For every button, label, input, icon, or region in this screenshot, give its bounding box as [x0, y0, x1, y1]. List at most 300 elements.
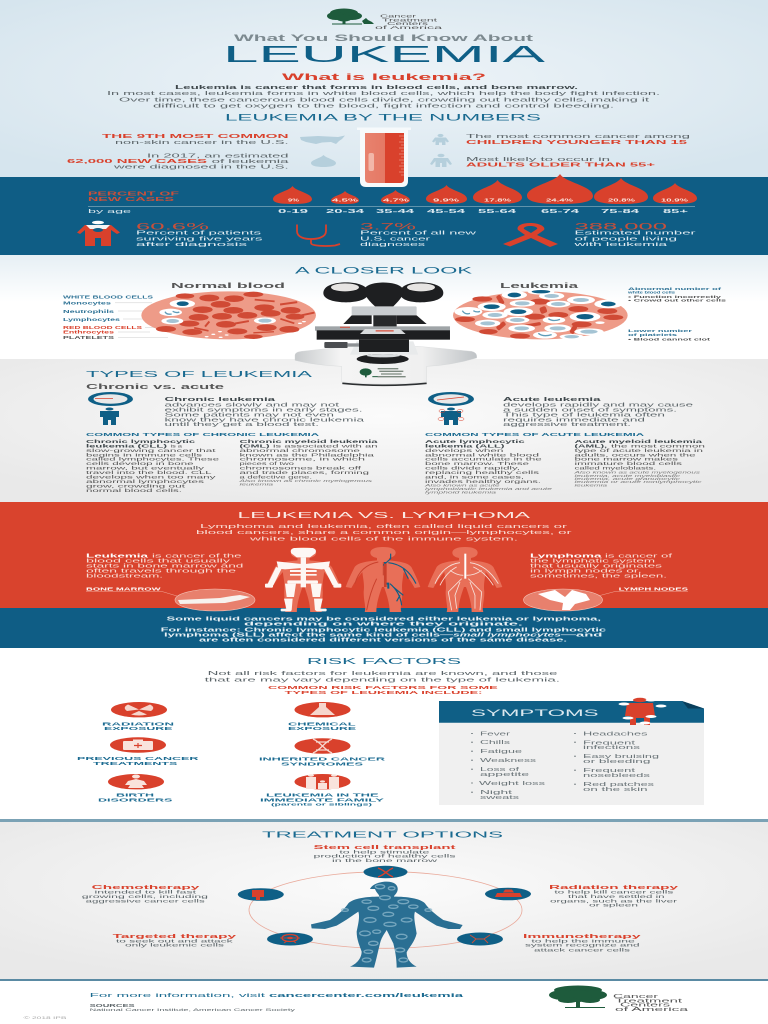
text block: chronic leukemia: Chronic leukemia — [164, 397, 275, 403]
heading: types of leukemia: TYPES OF LEUKEMIA — [86, 369, 313, 379]
symptoms list column 1: sweats — [480, 795, 520, 801]
text block: acute leukemia: a sudden onset of symptoms. — [503, 408, 677, 414]
panel: risk factors background — [0, 648, 768, 820]
chart: normal blood circle — [141, 291, 316, 339]
age labels: 55-64 — [478, 209, 516, 215]
callout: lymph nodes: LYMPH NODES — [619, 586, 688, 592]
icon: stethoscope — [297, 224, 340, 246]
logo: header: of America — [375, 25, 444, 30]
text block: chemotherapy: Chemotherapy — [92, 885, 202, 891]
text block: ALL — [423, 439, 552, 494]
stat: 60.6% — [136, 221, 263, 248]
text block: chemotherapy — [82, 885, 209, 904]
symptoms list column 2: Headaches — [583, 732, 648, 738]
footer: sources: National Cancer Institute, American Cancer Society — [90, 1008, 296, 1012]
age labels: 35-44 — [376, 209, 414, 215]
icon: ribbon — [503, 223, 558, 247]
panel: closer look background — [0, 255, 768, 359]
stat: 60.6%: surviving five years — [136, 236, 263, 242]
symptoms list column 1: Fatigue — [480, 749, 522, 755]
stat: 3.7% — [360, 221, 476, 248]
drop values: 4.5% — [332, 198, 359, 202]
risk: family — [260, 774, 384, 807]
risk: chemical exposure: EXPOSURE — [288, 726, 356, 731]
text block: definition: In most cases, leukemia forms in white blood cells, which help the body fight infection. — [107, 91, 661, 97]
risk: radiation exposure: RADIATION — [102, 722, 174, 726]
text block: acute leukemia: develops rapidly and may cause — [503, 402, 693, 408]
subheading: chronic vs acute: Chronic vs. acute — [86, 384, 224, 391]
text block: intro: blood cancers, share a common origin—lymphocytes, or — [196, 530, 572, 536]
text block: definition: Leukemia is cancer that forms in blood cells, and bone marrow. — [175, 85, 579, 91]
heading: by the numbers: LEUKEMIA BY THE NUMBERS — [225, 112, 541, 122]
text block: ALL: replacing healthy cells — [425, 470, 541, 475]
panel: header background — [0, 0, 768, 177]
stat: 3.7%: Percent of all new — [360, 230, 476, 236]
risk: birth disorders: BIRTH — [116, 792, 154, 798]
text block: liquid cancers note — [161, 616, 607, 644]
stat: 388,000: Estimated number — [574, 230, 696, 236]
text block: stem cell transplant: in the bone marrow — [332, 858, 438, 864]
text block: lymphoma description: is cancer of — [605, 553, 673, 559]
text block: targeted therapy: only leukemic cells — [125, 943, 225, 949]
text block: radiation therapy: organs, such as the liver — [550, 898, 678, 904]
text block: liquid cancers note: depending on where they originate. — [244, 622, 525, 628]
text block: CML: chromosomes break off — [240, 466, 363, 471]
figure: circulatory system — [346, 547, 420, 612]
text block: AML: leukemia, acute myeloblastic — [574, 474, 681, 478]
stat: children: CHILDREN YOUNGER THAN 15 — [466, 140, 687, 146]
symptoms list column 1: Weakness — [480, 758, 537, 764]
age labels: 65-74 — [541, 209, 579, 215]
stat: adults: ADULTS OLDER THAN 55+ — [466, 162, 655, 168]
footer: more information — [90, 993, 466, 999]
stat: 62,000 new cases: were diagnosed in the U.S. — [114, 165, 288, 171]
text block: liquid cancers note: lymphoma (SLL) affect the same kind of cells— — [164, 632, 453, 638]
stat: 9th most common: THE 9TH MOST COMMON — [102, 134, 289, 140]
icon: drop — [311, 155, 336, 167]
icon: chemotherapy node — [238, 888, 284, 901]
text block: liquid cancers note: small lymphocytes — [453, 632, 562, 638]
text block: liquid cancers note: Some liquid cancers may be considered either leukemia or lymphoma, — [166, 616, 603, 622]
drop values: 10.9% — [661, 198, 689, 202]
text block: CLL: called lymphocytes. These — [86, 457, 220, 462]
text block: CML: known as the Philadelphia — [240, 452, 375, 457]
labels: normal blood legend — [63, 294, 170, 340]
text block: leukemia description — [86, 553, 244, 579]
stat: 388,000: 388,000 — [574, 221, 667, 231]
text block: chronic leukemia: exhibit symptoms in early stages. — [164, 408, 362, 414]
subheading: common risk factors: COMMON RISK FACTORS FOR SOME — [268, 685, 498, 690]
text block: AML: adults, occurs when the — [574, 452, 697, 457]
text block: CML: pieces of two — [240, 461, 295, 466]
logo: header — [327, 8, 444, 30]
symptoms list column 1: Loss of — [480, 767, 520, 773]
stat: 388,000: of people living — [574, 236, 677, 242]
text block: CML: is associated with an — [273, 443, 379, 448]
heading: normal blood: Normal blood — [171, 281, 285, 290]
text block: definition: Over time, these cancerous blood cells divide, crowding out healthy cells, making it — [119, 97, 650, 103]
panel: blue note background — [0, 608, 768, 648]
text block: AML: type of acute leukemia in — [574, 448, 704, 453]
text block: CML: leukemia — [240, 482, 273, 486]
logo: footer — [549, 986, 688, 1013]
risk: radiation exposure: EXPOSURE — [104, 726, 173, 731]
text block: CML: a defective gene. — [240, 474, 312, 480]
symptoms list column 2: Red patches — [583, 782, 655, 788]
text block: chemotherapy: aggressive cancer cells — [86, 898, 206, 904]
panel: stats band background — [0, 177, 768, 255]
chart heading: PERCENT OF — [88, 192, 179, 198]
logo: header: Centers — [387, 21, 428, 26]
text block: radiation therapy: that have settled in — [568, 894, 665, 900]
labels: leukemia legend — [627, 286, 728, 342]
drop values: 17.8% — [484, 198, 512, 202]
logo: footer: Treatment — [615, 998, 683, 1004]
text block: immunotherapy: attack cancer cells — [534, 947, 631, 953]
text block: CLL: abnormal lymphocytes — [86, 479, 206, 484]
stat: 388,000 — [572, 221, 696, 248]
footer: sources — [90, 1003, 296, 1012]
text block: AML: bone marrow makes — [574, 457, 680, 462]
text block: CML — [237, 439, 379, 486]
text block: risk intro — [205, 671, 561, 684]
labels: leukemia legend: white blood cells — [627, 290, 676, 294]
labels: normal blood legend: Lymphocytes — [63, 317, 121, 322]
text block: AML: called myeloblasts. — [574, 466, 656, 471]
symptoms list column 1: Weight loss — [479, 781, 546, 787]
age labels: 75-84 — [601, 209, 639, 215]
text block: immunotherapy: Immunotherapy — [523, 934, 643, 940]
text block: CLL: begins in immune cells — [86, 452, 204, 457]
text block: definition — [107, 85, 661, 109]
text block: radiation therapy: or spleen — [589, 903, 639, 909]
text block: lymphoma description: that usually originates — [530, 563, 663, 569]
text block: targeted therapy: Targeted therapy — [113, 934, 238, 940]
panel: types background — [0, 359, 768, 502]
text block: intro: white blood cells of the immune system. — [247, 536, 519, 542]
labels: leukemia legend: • Crowd out other cells — [628, 298, 728, 302]
footer: copyright: © 2018 IPB — [24, 1016, 66, 1020]
text block: acute leukemia: Acute leukemia — [503, 397, 601, 403]
text block: CLL: is a — [170, 443, 183, 448]
figure: skeleton — [265, 547, 341, 612]
heading: leukemia sample: Leukemia — [500, 281, 580, 290]
text block: acute leukemia: aggressive treatment. — [503, 422, 631, 428]
text block: radiation therapy: Radiation therapy — [549, 885, 680, 891]
risk: family: IMMEDIATE FAMILY — [260, 798, 384, 802]
heading: risk factors: RISK FACTORS — [307, 656, 462, 666]
text block: stem cell transplant: Stem cell transplant — [314, 845, 456, 851]
text block: definition: difficult to get oxygen to the blood, fight infection and control bleeding. — [153, 103, 615, 109]
symptoms list column 1 — [471, 732, 546, 801]
risk: previous cancer treatments: PREVIOUS CANCER — [77, 756, 201, 761]
text block: acute leukemia: requires immediate and — [503, 418, 645, 424]
footer: more information: For more information, visit — [90, 993, 266, 999]
stat: 62,000 new cases: In 2017, an estimated — [147, 153, 289, 159]
text block: leukemia description: bloodstream. — [86, 573, 163, 579]
text block: leukemia description: often travels through the — [86, 568, 236, 574]
callout: bone marrow: BONE MARROW — [86, 586, 161, 592]
panel: leukemia vs lymphoma background — [0, 502, 768, 608]
footer: sources: SOURCES — [90, 1003, 135, 1008]
stat: 3.7%: diagnoses — [360, 242, 426, 248]
chart heading — [88, 192, 179, 203]
text block: CLL: leukemia (CLL) — [86, 443, 168, 448]
text block: CML: and trade places, forming — [240, 470, 370, 475]
risk: chemical exposure: CHEMICAL — [288, 722, 357, 726]
text block: leukemia description: starts in bone marrow and — [86, 563, 244, 569]
labels: normal blood legend: RED BLOOD CELLS — [63, 325, 142, 330]
icon: symptoms person — [618, 698, 666, 725]
diagram: treatment ring — [249, 872, 522, 948]
text block: CLL: grow, crowding out — [86, 483, 187, 488]
callout: lymph nodes — [524, 586, 688, 611]
drop values: 24.4% — [546, 198, 574, 202]
blood drops — [273, 174, 697, 204]
text block: stem cell transplant — [314, 845, 457, 864]
drop values: 9% — [288, 198, 299, 202]
footer: more information: cancercenter.com/leukemia — [269, 993, 466, 999]
risk: previous cancer treatments: TREATMENTS — [93, 761, 177, 766]
labels: normal blood legend: WHITE BLOOD CELLS — [63, 294, 153, 300]
microscope — [295, 282, 477, 385]
stat: adults: Most likely to occur in — [466, 157, 610, 163]
symptoms list column 1: Fever — [480, 732, 511, 738]
text block: liquid cancers note: —and — [561, 632, 602, 638]
bottom divider of treatment — [0, 979, 768, 981]
text block: ALL: abnormal white blood — [425, 452, 540, 457]
risk: previous cancer treatments — [77, 737, 201, 766]
figure: lymphatic system — [428, 547, 502, 612]
drop values: 9.9% — [433, 198, 460, 202]
risk: birth disorders: DISORDERS — [98, 798, 173, 802]
text block: ALL: bone marrow. These — [425, 461, 530, 466]
text block: lymphoma description: in lymph nodes or, — [530, 568, 642, 574]
icon: radiation node — [485, 888, 531, 900]
text block: AML: leukemia — [574, 484, 607, 488]
chart axis title: by age — [88, 209, 131, 215]
stat: 62,000 new cases: 62,000 NEW CASES — [67, 159, 209, 165]
stat: 60.6%: Percent of patients — [136, 230, 262, 236]
symptoms list column 2 — [574, 732, 659, 793]
text block: AML: (AML), — [574, 443, 607, 448]
panel: symptoms — [439, 698, 704, 805]
text block: AML: Acute myeloid leukemia — [574, 439, 703, 444]
age labels: 20-34 — [326, 209, 364, 215]
stat: children: The most common cancer among — [466, 134, 690, 140]
heading: a closer look: A CLOSER LOOK — [295, 265, 472, 275]
text block: lymphoma description: sometimes, the spleen. — [530, 573, 667, 579]
subheading: common types of acute leukemia: COMMON TYPES OF ACUTE LEUKEMIA — [425, 432, 646, 437]
text block: chronic leukemia: know they have chronic leukemia — [164, 418, 364, 424]
stat: adults — [466, 157, 655, 168]
text block: AML — [572, 439, 706, 488]
icon: US map — [300, 136, 345, 144]
subheading: common types of chronic leukemia: COMMON TYPES OF CHRONIC LEUKEMIA — [86, 432, 321, 437]
text block: liquid cancers note: are often considered different versions of the same disease. — [199, 638, 569, 644]
text block: CLL: travel into the blood. CLL — [86, 470, 213, 475]
age labels: 85+ — [663, 209, 688, 215]
symptoms list column 1: appetite — [480, 772, 529, 778]
logo: footer: of America — [615, 1007, 688, 1013]
text block: targeted therapy — [113, 934, 238, 949]
text block: chemotherapy: intended to kill fast — [94, 890, 198, 896]
stat: 62,000 new cases: of leukemia — [212, 159, 289, 165]
text block: ALL: cells accumulate in the — [425, 457, 543, 462]
text block: CLL: slow-growing cancer that — [86, 448, 217, 453]
text block: ALL: Also known as acute — [423, 484, 500, 488]
symptoms list column 2: on the skin — [583, 787, 648, 793]
text block: AML: leukemia or acute nonlymphocytic — [574, 480, 702, 484]
icon: child — [432, 134, 449, 145]
text block: lymphoma description: Lymphoma — [530, 553, 602, 559]
stat: 3.7%: U.S. cancer — [360, 236, 430, 242]
top divider of treatment — [0, 819, 768, 822]
icon: chronic gauge and person — [88, 392, 133, 425]
text block: targeted therapy: to seek out and attack — [116, 938, 234, 944]
stat: 9th most common — [102, 134, 289, 146]
labels: normal blood legend: Monocytes — [63, 300, 112, 306]
stat: 60.6%: after diagnosis — [136, 242, 248, 248]
icon: person survivor — [77, 221, 120, 246]
labels: leukemia legend: Lower number — [628, 328, 693, 333]
text block: AML: leukemia, acute granulocytic — [574, 477, 681, 481]
labels: normal blood legend: Neutrophils — [63, 309, 115, 314]
risk: inherited cancer syndromes — [259, 738, 387, 767]
risk: radiation exposure — [102, 702, 174, 731]
text block: radiation therapy: to help kill cancer cells — [554, 890, 675, 896]
text block: CLL — [86, 439, 220, 493]
symptoms list column 2: nosebleeds — [583, 773, 651, 779]
text block: intro: Lymphoma and leukemia, often called liquid cancers or — [200, 524, 567, 530]
symptoms list column 2: Frequent — [583, 768, 636, 774]
age labels: 0-19 — [278, 209, 308, 215]
text block: risk intro: Not all risk factors for leukemia are known, and those — [208, 671, 557, 677]
text block: risk intro: that are may vary depending on the type of leukemia. — [205, 678, 561, 684]
text block: leukemia description: blood cells that usually — [86, 558, 231, 564]
icon: acute gauge and person — [428, 392, 474, 425]
labels: leukemia legend: of platelets — [628, 332, 679, 337]
text block: ALL: invades healthy organs. — [425, 479, 541, 484]
labels: normal blood legend: Enthrocytes — [63, 330, 115, 334]
symptoms list column 2: infections — [583, 745, 641, 751]
text block: CML: Also known as chronic myelogenous — [237, 479, 373, 483]
risk: chemical exposure — [288, 702, 357, 731]
stat: 388,000: with leukemia — [572, 242, 667, 248]
icon: adult — [430, 154, 452, 167]
panel: treatment background — [0, 822, 768, 979]
text block: ALL: leukemia (ALL) — [425, 443, 506, 448]
logo: footer: Centers — [620, 1003, 671, 1009]
logo: footer: Cancer — [613, 994, 658, 1000]
text block: acute leukemia: This type of leukemia often — [503, 412, 665, 418]
text block: chemotherapy: growing cells, including — [82, 894, 209, 900]
symptoms list column 2: Frequent — [583, 740, 636, 746]
text block: AML: the most common — [611, 443, 706, 448]
text block: liquid cancers note: For instance: Chronic lymphocytic leukemia (CLL) and small lymphocytic — [161, 628, 607, 634]
logo: header: Treatment — [382, 18, 439, 22]
text block: ALL: lymphoid leukemia — [424, 490, 496, 494]
heading: what is leukemia: What is leukemia? — [282, 72, 486, 83]
chart heading: NEW CASES — [88, 197, 176, 203]
symptoms list column 2: or bleeding — [583, 759, 651, 765]
subheading: common risk factors: TYPES OF LEUKEMIA INCLUDE: — [285, 690, 484, 695]
risk: inherited cancer syndromes: INHERITED CANCER — [259, 757, 387, 762]
heading: treatment options: TREATMENT OPTIONS — [262, 829, 504, 839]
callout: bone marrow — [86, 586, 255, 611]
text block: ALL: Acute lymphocytic — [425, 439, 526, 444]
stat: 3.7%: 3.7% — [360, 221, 416, 231]
risk: family: LEUKEMIA IN THE — [266, 792, 379, 798]
symptoms list column 1: Night — [480, 790, 513, 796]
age labels: 45-54 — [427, 209, 465, 215]
text block: lymphoma description: the lymphatic system — [530, 558, 656, 564]
text block: ALL: and, in some cases, — [425, 474, 524, 480]
text block: CLL: marrow, but eventually — [86, 466, 206, 471]
heading: leukemia vs lymphoma: LEUKEMIA VS. LYMPHOMA — [238, 510, 531, 520]
text block: CLL: normal blood cells. — [86, 488, 182, 493]
stat: 60.6%: 60.6% — [136, 221, 209, 231]
text block: immunotherapy: system recognize and — [525, 943, 640, 949]
text block: leukemia description: Leukemia — [86, 553, 148, 559]
text block: CLL: cells develop in bone — [86, 461, 195, 466]
drop values: 20.8% — [608, 198, 636, 202]
labels: leukemia legend: • Function incorrectly — [628, 294, 723, 299]
chart: leukemia circle — [453, 289, 628, 339]
text block: ALL: cells divide rapidly, — [425, 466, 520, 471]
risk: inherited cancer syndromes: SYNDROMES — [281, 762, 363, 767]
labels: normal blood legend: PLATELETS — [63, 335, 114, 340]
stat: 62,000 new cases — [67, 153, 289, 171]
test tube — [357, 128, 411, 187]
text block: CLL: develops when too many — [86, 474, 217, 480]
text block: CLL: Chronic lymphocytic — [86, 439, 196, 444]
text block: lymphoma description — [530, 553, 673, 579]
chart: percent of new cases by age — [88, 174, 697, 215]
symptoms list column 1: Chills — [480, 740, 511, 746]
text block: leukemia description: is cancer of the — [152, 553, 242, 559]
drop values: 4.7% — [383, 198, 410, 202]
text block: stem cell transplant: to help stimulate — [339, 849, 430, 855]
text block: ALL: develops when — [425, 448, 505, 453]
text block: CML: abnormal chromosome — [240, 448, 361, 453]
labels: leukemia legend: Abnormal number of — [628, 286, 723, 291]
subheading: common risk factors — [268, 685, 498, 695]
logo: header: Cancer — [380, 14, 418, 18]
text block: immunotherapy — [523, 934, 643, 953]
icon: targeted therapy node — [267, 932, 313, 946]
figure: human body — [311, 882, 463, 968]
labels: leukemia legend: • Blood cannot clot — [628, 336, 711, 342]
text block: stem cell transplant: production of healthy cells — [314, 854, 457, 860]
stat: 9th most common: non-skin cancer in the U.S. — [115, 140, 288, 146]
text block: CML: Chronic myeloid leukemia — [240, 439, 379, 444]
drop values — [288, 198, 689, 202]
text block: chronic leukemia: advances slowly and may not — [164, 402, 340, 408]
stat: children — [466, 134, 690, 146]
text block: chronic leukemia: Some patients may not even — [164, 412, 334, 418]
text block: radiation therapy — [549, 885, 680, 909]
chart axis — [88, 206, 695, 207]
text block: chronic leukemia — [164, 397, 364, 428]
text block: AML: Also known as acute myelogenous — [572, 470, 701, 474]
risk: birth disorders — [98, 774, 173, 802]
age labels — [278, 209, 688, 215]
symptoms list column 2: Easy bruising — [583, 754, 659, 760]
text block: CML: chromosome, in which — [240, 457, 366, 462]
text block: CML: (CML) — [240, 443, 271, 448]
icon: immunotherapy node — [457, 932, 503, 946]
